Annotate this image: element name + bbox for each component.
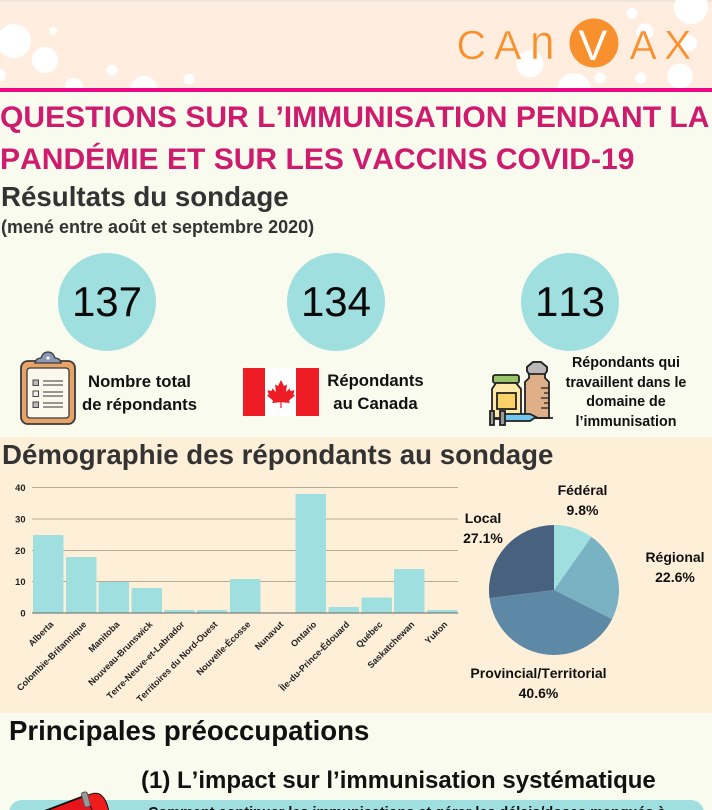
bar chart: respondents by province: Nunavut (253, 619, 285, 652)
bar chart: respondents by province: Saskatchewan (365, 619, 416, 670)
label: total respondents (82, 372, 197, 414)
pie chart: level of government (463, 482, 705, 701)
label: immunization workers (566, 355, 686, 430)
heading: main concerns: Principales préoccupations (9, 715, 369, 746)
bar chart: respondents by province: 0 (20, 608, 26, 618)
bar chart: respondents by province: 40 (15, 483, 26, 493)
header banner with bubbles and logo: V (578, 22, 608, 70)
icon: Canadian flag (243, 368, 319, 416)
bar chart: respondents by province: 20 (15, 546, 26, 556)
bar chart: respondents by province: 10 (15, 577, 26, 587)
label: immunization workers: Répondants qui (572, 355, 680, 371)
pie chart: level of government: 9.8% (567, 502, 599, 518)
header banner with bubbles and logo: A (494, 22, 522, 68)
header banner with bubbles and logo: A (630, 22, 658, 68)
label: total respondents: de répondants (82, 395, 197, 414)
header banner with bubbles and logo: X (664, 22, 691, 68)
pie chart: level of government: Provincial/Territorial (470, 665, 607, 681)
label: immunization workers: l’immunisation (576, 414, 676, 430)
heading: impact on routine immunization: (1) L’impact sur l’immunisation systématique (141, 767, 656, 794)
bar chart: respondents by province: Québec (354, 619, 384, 650)
icon: vaccine vials and syringe (489, 361, 553, 426)
panel: question callout (9, 800, 704, 810)
label: immunization workers: domaine de (586, 394, 666, 410)
stat circle: 113: 113 (535, 278, 605, 325)
icon: clipboard (20, 351, 76, 425)
label: total respondents: Nombre total (88, 372, 191, 391)
title: PANDÉMIE ET SUR LES VACCINS COVID-19 (0, 143, 634, 176)
bar chart: respondents by province: 30 (15, 514, 26, 524)
pie chart: level of government: Fédéral (558, 482, 607, 498)
label: respondents in Canada: Répondants (327, 371, 424, 390)
bar chart: respondents by province: Colombie-Britannique (15, 619, 88, 693)
title (0, 101, 709, 176)
stat circle: 137 (58, 253, 156, 351)
stat circle: 137: 137 (72, 278, 142, 325)
bar chart: respondents by province: Ontario (289, 619, 319, 649)
stat circle: 134 (287, 253, 385, 351)
bar chart: respondents by province: Manitoba (86, 619, 122, 654)
header banner with bubbles and logo (0, 0, 712, 93)
bar chart: respondents by province: Alberta (26, 619, 56, 648)
stat circle: 113 (521, 253, 619, 351)
pie chart: level of government: 22.6% (655, 569, 695, 585)
survey dates: (mené entre août et septembre 2020) (1, 217, 314, 237)
pie chart: level of government: 40.6% (519, 685, 559, 701)
bar chart: respondents by province: Yukon (423, 619, 449, 646)
pie chart: level of government: Local (465, 510, 501, 526)
bar chart: respondents by province: Nouvelle-Écosse (194, 619, 252, 677)
header banner with bubbles and logo: n (530, 15, 555, 70)
pie chart: level of government: 27.1% (463, 530, 503, 546)
subtitle: survey results: Résultats du sondage (1, 181, 289, 212)
pie chart: level of government: Régional (645, 549, 705, 565)
bar chart: respondents by province: Terre-Neuve-et-Labrador (105, 619, 187, 701)
header banner with bubbles and logo: C (456, 22, 486, 68)
label: respondents in Canada: au Canada (333, 394, 418, 413)
bar chart: respondents by province (15, 483, 458, 704)
heading: demographics: Démographie des répondants au sondage (2, 439, 553, 470)
title: QUESTIONS SUR L’IMMUNISATION PENDANT LA (0, 101, 709, 134)
bar chart: respondents by province: Territoires du Nord-Ouest (135, 619, 219, 704)
stat circle: 134: 134 (301, 278, 371, 325)
bar chart: respondents by province: Île-du-Prince-Édouard (276, 619, 351, 694)
label: respondents in Canada (327, 371, 424, 413)
label: immunization workers: travaillent dans le (566, 375, 686, 391)
icon: red megaphone (44, 792, 110, 810)
bar chart: respondents by province: Nouveau-Brunswick (86, 619, 155, 688)
panel: demographics band (0, 437, 712, 713)
